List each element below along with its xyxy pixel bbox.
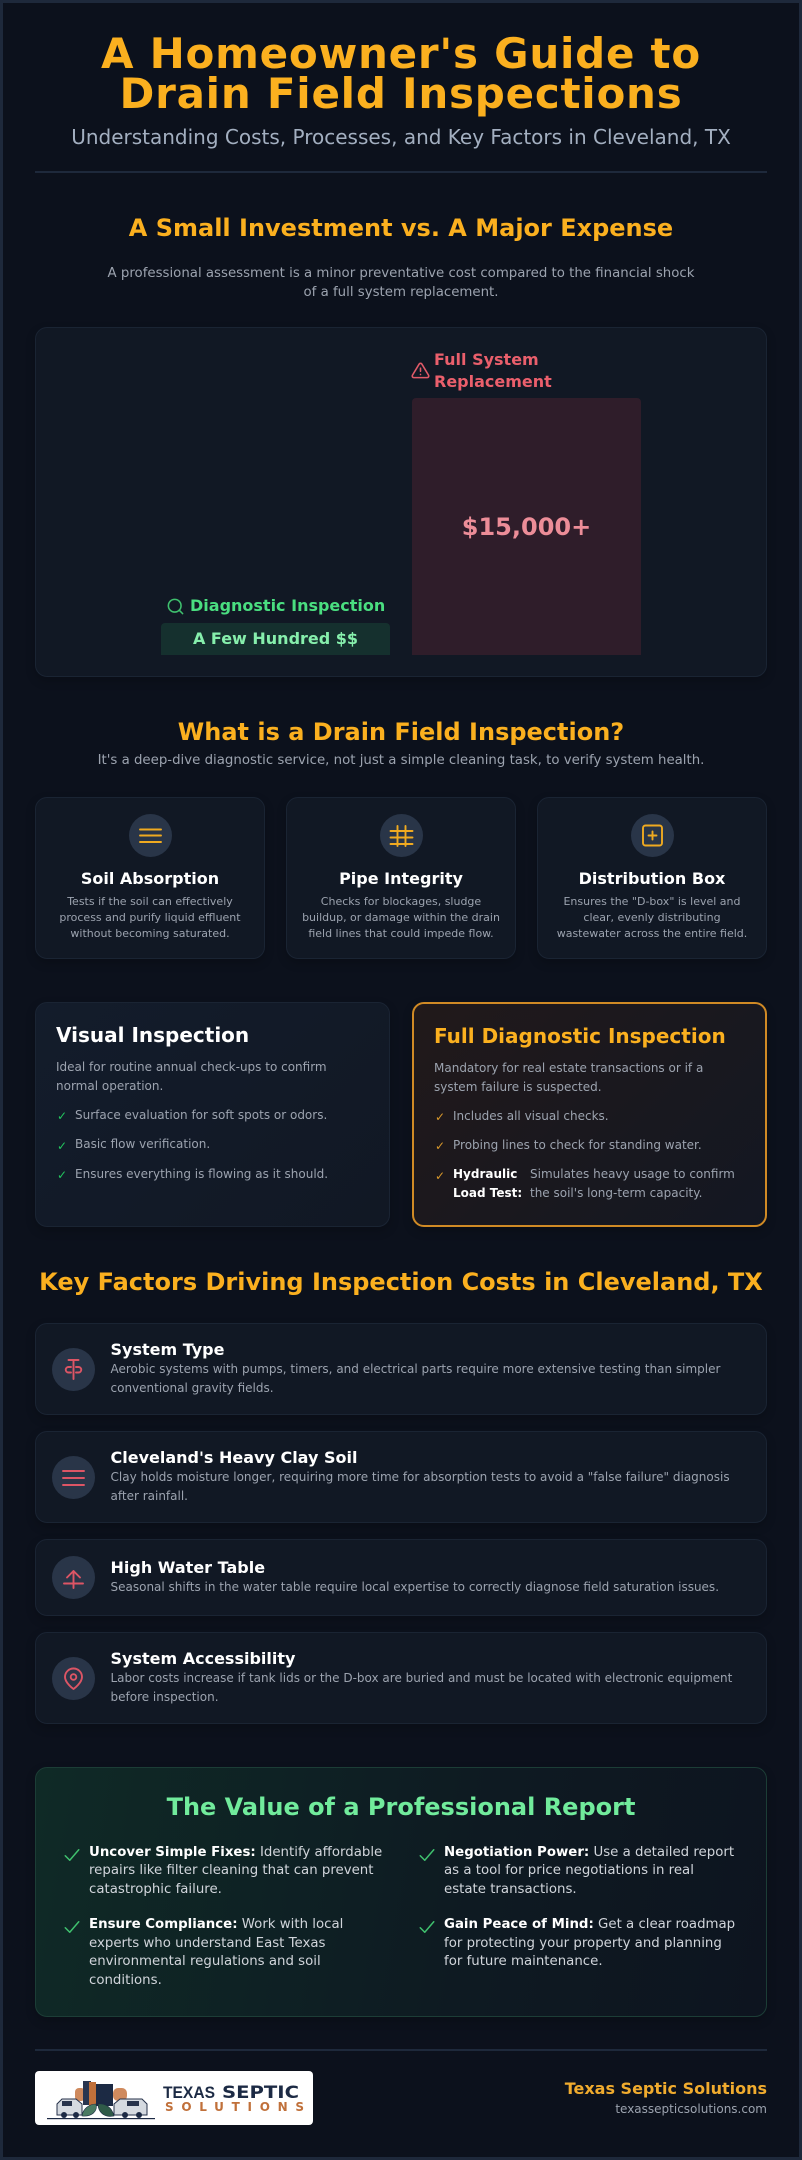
bold term: Load Test: <box>453 1186 522 1200</box>
benefit text: estate transactions. <box>444 1882 577 1897</box>
label: full system replacement: Replacement <box>434 372 552 391</box>
panel text <box>56 1060 327 1092</box>
factor text: after rainfall. <box>110 1488 188 1502</box>
benefit text: Ensure Compliance: Work with local <box>89 1917 343 1932</box>
list text: the soil's long-term capacity. <box>530 1186 702 1200</box>
intro paragraph: of a full system replacement. <box>303 284 499 300</box>
footer url: texassepticsolutions.com <box>615 2102 767 2116</box>
title: Drain Field Inspections <box>120 69 682 118</box>
panel text <box>434 1060 703 1094</box>
heading: what is an inspection: What is a Drain Field Inspection? <box>178 718 624 746</box>
panel title: Visual Inspection <box>56 1023 249 1047</box>
card text: process and purify liquid effluent <box>59 911 241 924</box>
card text: without becoming saturated. <box>70 927 230 940</box>
card text <box>59 895 241 940</box>
intro paragraph <box>108 266 694 300</box>
panel text: normal operation. <box>56 1078 163 1092</box>
factor: system type <box>35 1323 767 1415</box>
list item: ✓ <box>435 1139 445 1153</box>
list item: ✓ <box>57 1138 67 1152</box>
factor text <box>110 1670 732 1704</box>
icon: building <box>83 2081 113 2106</box>
benefit text <box>89 1917 343 1988</box>
title <box>101 29 701 118</box>
bold term: Hydraulic <box>453 1167 517 1181</box>
card text: buildup, or damage within the drain <box>302 911 500 924</box>
bold term <box>453 1167 522 1200</box>
list text: Includes all visual checks. <box>453 1108 609 1122</box>
factor text: conventional gravity fields. <box>110 1380 274 1394</box>
card title: Distribution Box <box>579 868 725 888</box>
icon: box with plus <box>631 814 674 857</box>
logo wordmark: SEPTIC <box>222 2083 299 2102</box>
benefit text: Gain Peace of Mind: Get a clear roadmap <box>444 1917 735 1932</box>
icon: soil lines <box>129 814 172 857</box>
factor: water table <box>35 1539 767 1616</box>
panel: value of a report <box>35 1767 767 2017</box>
icon: orange tanks <box>75 2088 127 2101</box>
list item: ✓ <box>57 1109 67 1123</box>
list text: Ensures everything is flowing as it should. <box>75 1166 328 1180</box>
heading: investment vs expense: A Small Investment vs. A Major Expense <box>129 214 673 242</box>
list text: Basic flow verification. <box>75 1137 210 1151</box>
divider <box>35 171 767 173</box>
card text <box>302 895 500 940</box>
panel text: Mandatory for real estate transactions or if a <box>434 1060 703 1074</box>
factor text <box>110 1470 730 1502</box>
benefit text: experts who understand East Texas <box>89 1936 326 1951</box>
factor title: High Water Table <box>110 1558 265 1577</box>
panel: visual inspection <box>35 1002 390 1227</box>
benefit text <box>444 1917 735 1969</box>
card text: Ensures the "D-box" is level and <box>563 895 741 908</box>
bar: replacement cost <box>412 398 641 655</box>
panel: cost comparison chart <box>35 327 767 677</box>
icon: trucks and leaves <box>47 2099 155 2119</box>
factor title: System Accessibility <box>110 1649 295 1668</box>
divider <box>35 2049 767 2051</box>
benefit text: Uncover Simple Fixes: Identify affordable <box>89 1845 382 1860</box>
card text: Tests if the soil can effectively <box>67 895 233 908</box>
card title: Soil Absorption <box>81 868 219 888</box>
benefit text: catastrophic failure. <box>89 1882 222 1897</box>
heading: key factors: Key Factors Driving Inspection Costs in Cleveland, TX <box>39 1268 763 1296</box>
list item: ✓ <box>57 1168 67 1182</box>
list item: ✓ <box>435 1110 445 1124</box>
benefit text: environmental regulations and soil <box>89 1954 321 1969</box>
panel text: Ideal for routine annual check-ups to confirm <box>56 1060 327 1074</box>
factor text: Clay holds moisture longer, requiring more time for absorption tests to avoid a "false failure" diagnosis <box>110 1470 730 1484</box>
icon: check <box>64 1849 80 1861</box>
logo wordmark: TEXAS <box>163 2084 215 2102</box>
factor title: System Type <box>110 1340 224 1359</box>
card title: Pipe Integrity <box>339 868 463 888</box>
panel: full diagnostic inspection <box>412 1002 767 1227</box>
list text: Simulates heavy usage to confirm <box>530 1167 735 1181</box>
benefit text: for protecting your property and planning <box>444 1936 722 1951</box>
icon: rising water <box>52 1556 95 1598</box>
card: pipe integrity <box>286 797 516 959</box>
label: full system replacement <box>434 350 552 391</box>
card: distribution box <box>537 797 767 959</box>
icon: check <box>64 1921 80 1933</box>
card text <box>557 895 747 940</box>
label: diagnostic inspection: Diagnostic Inspection <box>190 596 385 615</box>
bar: replacement cost: $15,000+ <box>462 512 591 540</box>
card text: Checks for blockages, sludge <box>321 895 481 908</box>
card text: clear, evenly distributing <box>583 911 721 924</box>
intro paragraph: A professional assessment is a minor preventative cost compared to the financial shock <box>108 266 694 280</box>
card: soil absorption <box>35 797 265 959</box>
benefit text: as a tool for price negotiations in real <box>444 1863 694 1878</box>
logo wordmark <box>163 2083 299 2102</box>
logo <box>35 2071 313 2125</box>
benefit text: repairs like filter cleaning that can prevent <box>89 1863 374 1878</box>
bar: inspection cost <box>161 623 390 655</box>
card text: wastewater across the entire field. <box>557 927 747 940</box>
icon: warning triangle <box>411 362 430 378</box>
factor text: Aerobic systems with pumps, timers, and electrical parts require more extensive testing than simpler <box>110 1362 720 1376</box>
footer company name: Texas Septic Solutions <box>565 2079 767 2098</box>
card text: field lines that could impede flow. <box>308 927 494 940</box>
icon: soil lines <box>52 1456 95 1498</box>
icon: pipe grid <box>380 814 423 857</box>
panel title: Full Diagnostic Inspection <box>434 1024 726 1048</box>
factor title: Cleveland's Heavy Clay Soil <box>110 1448 357 1467</box>
benefit text: for future maintenance. <box>444 1954 603 1969</box>
title: A Homeowner's Guide to <box>101 29 701 78</box>
list text: Surface evaluation for soft spots or odors. <box>75 1108 327 1122</box>
logo tagline: SOLUTIONS <box>165 2100 304 2114</box>
factor: accessibility <box>35 1632 767 1724</box>
icon: check <box>420 1849 434 1861</box>
list item: ✓ <box>435 1168 445 1182</box>
list text <box>530 1167 735 1200</box>
list text: Probing lines to check for standing water. <box>453 1138 702 1152</box>
icon: magnifier <box>168 598 184 614</box>
factor text <box>110 1362 720 1394</box>
factor text: Labor costs increase if tank lids or the D-box are buried and must be located with electronic equipment <box>110 1670 732 1684</box>
factor text: before inspection. <box>110 1690 219 1704</box>
label: full system replacement: Full System <box>434 350 539 369</box>
benefit text <box>89 1845 382 1897</box>
section intro: It's a deep-dive diagnostic service, not just a simple cleaning task, to verify system health. <box>98 753 704 768</box>
factor: clay soil <box>35 1431 767 1523</box>
panel title: The Value of a Professional Report <box>167 1793 635 1821</box>
icon: check <box>420 1921 434 1933</box>
icon: pump <box>52 1348 95 1390</box>
factor text: Seasonal shifts in the water table require local expertise to correctly diagnose field saturation issues. <box>110 1580 719 1594</box>
panel text: system failure is suspected. <box>434 1080 602 1094</box>
icon: map pin <box>52 1656 95 1700</box>
bar: inspection cost: A Few Hundred $$ <box>193 629 358 648</box>
benefit text <box>444 1845 734 1897</box>
subtitle: Understanding Costs, Processes, and Key Factors in Cleveland, TX <box>71 125 731 149</box>
benefit text: Negotiation Power: Use a detailed report <box>444 1845 734 1860</box>
benefit text: conditions. <box>89 1973 162 1988</box>
